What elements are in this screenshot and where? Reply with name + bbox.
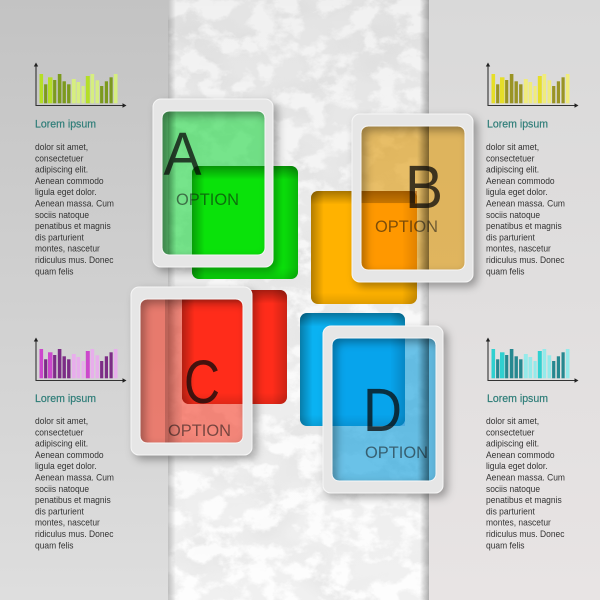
text block: bottom left: penatibus et magnis xyxy=(35,495,111,505)
text block: top left: sociis natoque xyxy=(35,209,89,220)
text block: bottom left: sociis natoque xyxy=(35,483,89,494)
text block: bottom left: dis parturient xyxy=(35,506,84,517)
letter B: B xyxy=(405,153,443,221)
text block: top left: dolor sit amet, xyxy=(35,142,88,152)
text block: top right: sociis natoque xyxy=(486,209,540,220)
panel: option A card xyxy=(153,99,298,279)
text block: top left: ridiculus mus. Donec xyxy=(35,255,114,265)
text block: top right: Aenean commodo xyxy=(486,175,555,186)
text block: top left: ligula eget dolor. xyxy=(35,187,97,197)
text block: top right: montes, nascetur xyxy=(486,243,551,254)
text block: bottom right: consectetuer xyxy=(486,427,534,437)
text block: bottom right: penatibus et magnis xyxy=(486,495,562,505)
chart: magenta bars xyxy=(34,338,126,383)
text block: top right: consectetuer xyxy=(486,153,534,163)
text block: bottom right: quam felis xyxy=(486,540,525,550)
panel: option C card xyxy=(131,287,287,455)
text block: top right: ridiculus mus. Donec xyxy=(486,255,565,265)
heading: bottom left: Lorem ipsum xyxy=(35,393,96,405)
panel: right background xyxy=(429,0,600,600)
text block: top left: Aenean massa. Cum xyxy=(35,198,114,209)
text block: bottom left: adipiscing elit. xyxy=(35,438,88,449)
text block: top left: consectetuer xyxy=(35,153,83,163)
letter C: C xyxy=(184,348,220,416)
heading: bottom right: Lorem ipsum xyxy=(487,393,548,405)
text block: bottom left: quam felis xyxy=(35,540,74,550)
label: option D: OPTION xyxy=(365,444,428,462)
text block: top right: dis parturient xyxy=(486,232,535,243)
chart: teal bars xyxy=(486,338,578,383)
panel: option D card xyxy=(300,313,443,493)
text block: bottom left: dolor sit amet, xyxy=(35,416,88,426)
chart: yellow bars xyxy=(486,62,578,108)
text block: top left: penatibus et magnis xyxy=(35,221,111,231)
text block: bottom left: consectetuer xyxy=(35,427,83,437)
label: option A: OPTION xyxy=(176,191,239,209)
text block: bottom right: ridiculus mus. Donec xyxy=(486,529,565,539)
text block: top left: montes, nascetur xyxy=(35,243,100,254)
text block: top right: dolor sit amet, xyxy=(486,142,539,152)
text block: top right: adipiscing elit. xyxy=(486,164,539,175)
text block: bottom left: ridiculus mus. Donec xyxy=(35,529,114,539)
text block: bottom right: montes, nascetur xyxy=(486,517,551,528)
panel: option B card xyxy=(311,114,473,304)
label: option C: OPTION xyxy=(168,422,231,440)
text block: bottom right: sociis natoque xyxy=(486,483,540,494)
panel: central textured column xyxy=(168,0,429,600)
text block: bottom left: montes, nascetur xyxy=(35,517,100,528)
text block: bottom right: dolor sit amet, xyxy=(486,416,539,426)
text block: top right: ligula eget dolor. xyxy=(486,187,548,197)
text block: bottom left: Aenean commodo xyxy=(35,449,104,460)
panel: left background xyxy=(0,0,168,600)
text block: top left: dis parturient xyxy=(35,232,84,243)
letter D: D xyxy=(363,376,402,444)
text block: top left: quam felis xyxy=(35,266,74,276)
text block: bottom right: ligula eget dolor. xyxy=(486,461,548,471)
text block: top left: Aenean commodo xyxy=(35,175,104,186)
text block: top right: penatibus et magnis xyxy=(486,221,562,231)
text block: top right: Aenean massa. Cum xyxy=(486,198,565,209)
label: option B: OPTION xyxy=(375,218,438,236)
heading: top right: Lorem ipsum xyxy=(487,118,548,130)
text block: bottom right: Aenean commodo xyxy=(486,449,555,460)
heading: top left: Lorem ipsum xyxy=(35,118,96,130)
text block: bottom right: dis parturient xyxy=(486,506,535,517)
letter A: A xyxy=(164,120,202,188)
text block: bottom right: adipiscing elit. xyxy=(486,438,539,449)
text block: top left: adipiscing elit. xyxy=(35,164,88,175)
chart: green bars xyxy=(34,62,126,108)
text block: bottom left: Aenean massa. Cum xyxy=(35,472,114,483)
text block: bottom left: ligula eget dolor. xyxy=(35,461,97,471)
text block: top right: quam felis xyxy=(486,266,525,276)
text block: bottom right: Aenean massa. Cum xyxy=(486,472,565,483)
